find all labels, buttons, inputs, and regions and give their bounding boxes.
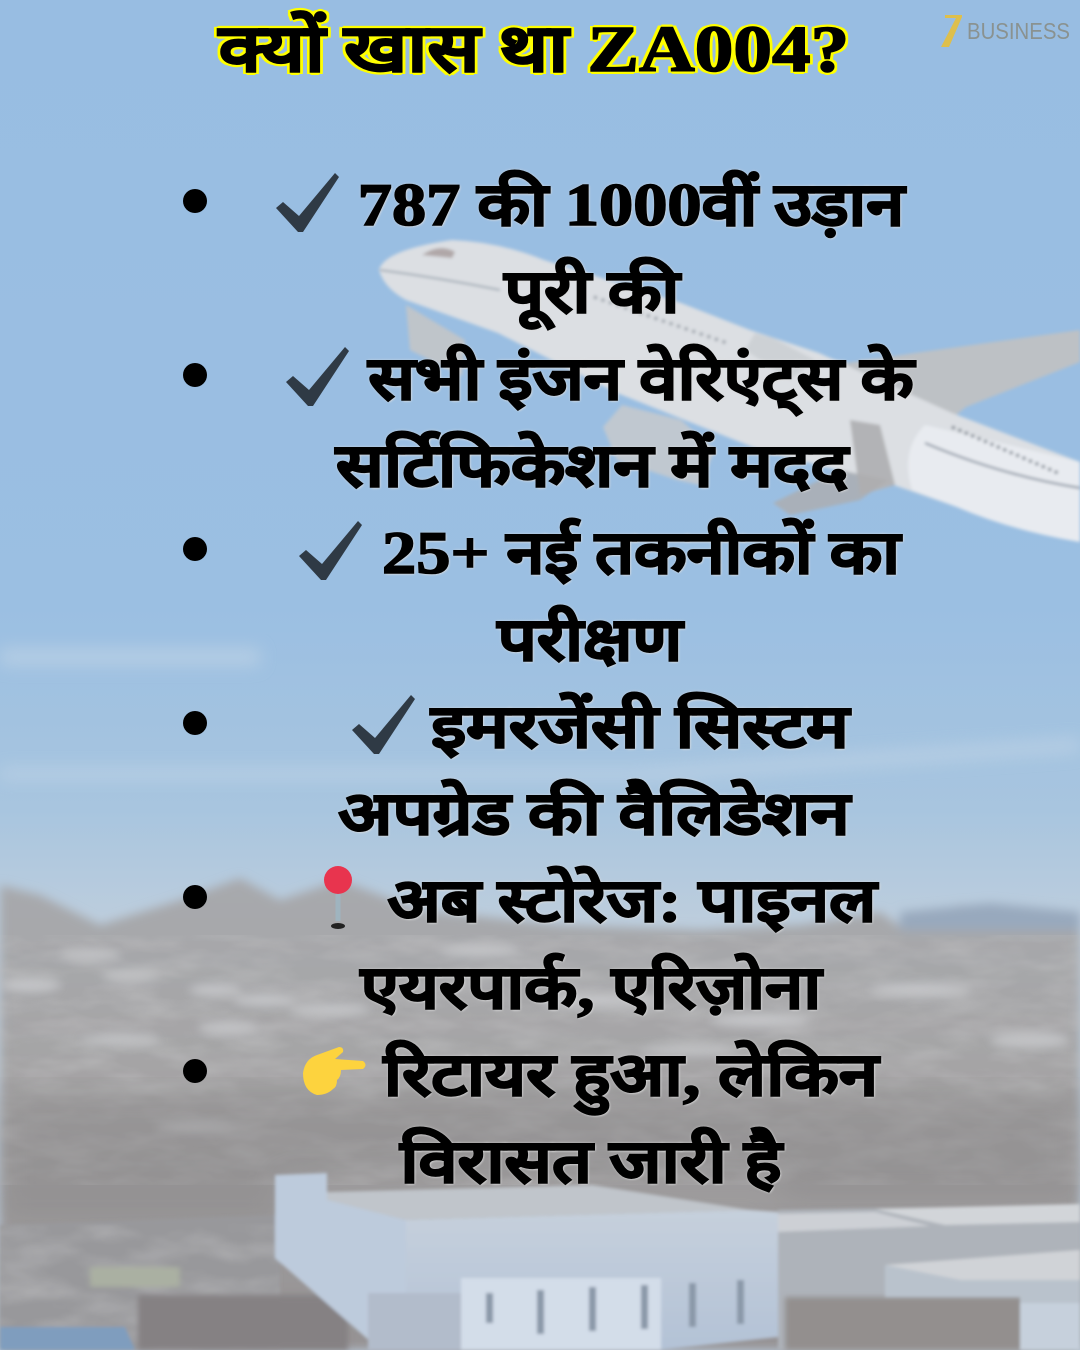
item 1 line 1: 787 की 1000वीं उड़ान (358, 172, 904, 238)
buildings (0, 1173, 1080, 1350)
plane (379, 240, 1080, 542)
icon: pointing hand (303, 1047, 366, 1095)
logo: Z Business (941, 15, 1070, 47)
item 3 line 1: 25+ नई तकनीकों का (382, 520, 900, 586)
bullet 4 (183, 711, 207, 735)
bullet 5 (183, 885, 207, 909)
bullet 6 (183, 1059, 207, 1083)
bullet 1 (183, 189, 207, 213)
item 5 line 1: अब स्टोरेज: पाइनल (388, 868, 876, 934)
bullet 3 (183, 537, 207, 561)
item 4 line 2: अपग्रेड की वैलिडेशन (338, 781, 850, 847)
item 5 line 2: एयरपार्क, एरिज़ोना (361, 955, 821, 1021)
item 3 line 2: परीक्षण (498, 607, 682, 673)
item 2 line 1: सभी इंजन वेरिएंट्स के (368, 346, 914, 412)
icon: check 4 (352, 695, 415, 754)
icon: map pin (324, 866, 352, 929)
item 4 line 1: इमरजेंसी सिस्टम (431, 694, 849, 760)
icon: check 2 (286, 347, 349, 406)
item 1 line 2: पूरी की (505, 259, 679, 325)
item 6 line 2: विरासत जारी है (400, 1129, 782, 1195)
landscape (0, 878, 1080, 1350)
icon: check 1 (276, 173, 339, 232)
bullet list (183, 168, 918, 1195)
item 6 line 1: रिटायर हुआ, लेकिन (384, 1042, 878, 1108)
title: क्यों खास था ZA004? (219, 13, 849, 86)
bullet 2 (183, 363, 207, 387)
item 2 line 2: सर्टिफिकेशन में मदद (336, 433, 848, 499)
icon: check 3 (299, 521, 362, 580)
